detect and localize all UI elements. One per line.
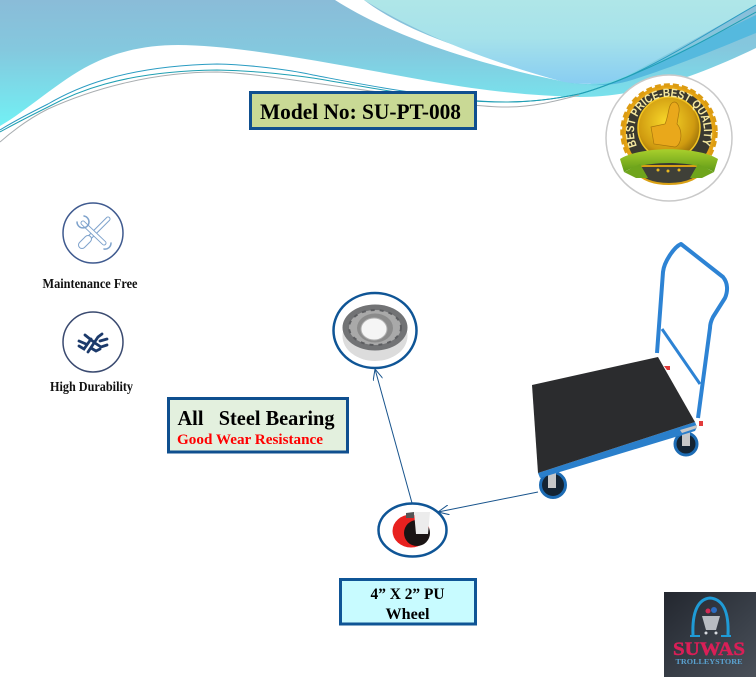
steel bearing text box — [168, 398, 348, 452]
handle frame — [657, 244, 727, 418]
icon: maintenance tools — [63, 203, 123, 263]
arrow: wheel to bearing — [375, 369, 412, 503]
red clips — [664, 366, 703, 426]
model number box — [250, 92, 476, 128]
product photo: platform trolley — [532, 244, 727, 498]
wheel photo callout — [378, 504, 446, 556]
rear wheel — [675, 430, 697, 455]
arrow: trolley to wheel — [438, 492, 538, 512]
front wheel — [540, 472, 566, 498]
model number box: Model No: SU-PT-008 — [260, 99, 461, 124]
logo: Suwas Trolleystore: SUWAS — [673, 639, 745, 660]
label: high durability: High Durability — [50, 380, 133, 395]
wheel size text box: 4” X 2” PU — [370, 586, 444, 603]
logo: Suwas Trolleystore: TROLLEYSTORE — [676, 658, 743, 666]
steel bearing text box: All Steel Bearing — [178, 406, 335, 430]
deck board — [532, 357, 695, 473]
blue deck frame — [538, 422, 697, 478]
wheel size text box: Wheel — [386, 606, 430, 623]
bearing photo callout — [334, 293, 416, 368]
label: maintenance free: Maintenance Free — [42, 277, 138, 292]
badge: best price best quality: BEST PRICE-BEST QUALITY — [626, 88, 712, 148]
header wave graphic — [0, 0, 756, 142]
logo: Suwas Trolleystore — [664, 592, 756, 677]
wheel size text box — [340, 580, 476, 624]
handle cross bar — [662, 329, 700, 384]
icon: high durability weave — [63, 312, 123, 372]
steel bearing text box: Good Wear Resistance — [177, 432, 324, 448]
badge: best price best quality — [605, 74, 733, 202]
